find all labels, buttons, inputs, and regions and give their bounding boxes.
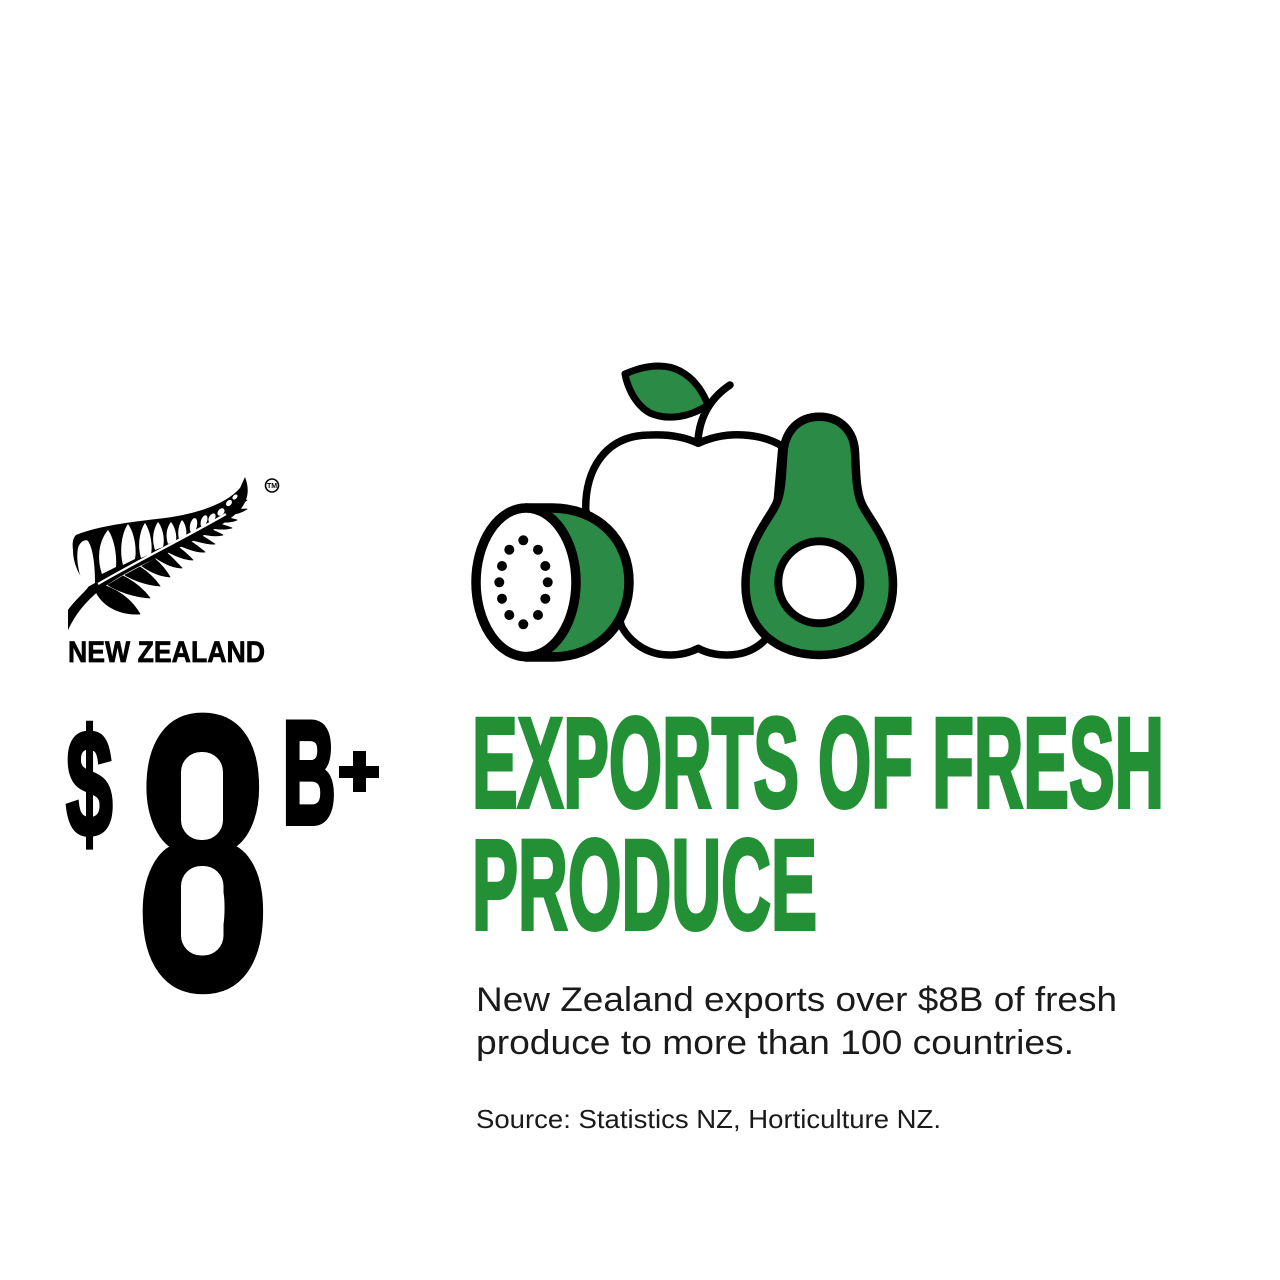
fern upper white leaflets <box>77 493 239 588</box>
body text <box>476 981 1117 1062</box>
icon: fresh produce (kiwi, apple, avocado) <box>476 366 893 657</box>
apple stem <box>698 385 730 440</box>
dollar sign: $ <box>66 700 113 869</box>
numeral 8 lower counter <box>181 866 224 956</box>
icon: apple <box>586 366 782 655</box>
logo wordmark: NEW ZEALAND <box>68 636 265 669</box>
body line 1: New Zealand exports over $8B of fresh <box>476 981 1117 1019</box>
body line 2: produce to more than 100 countries. <box>476 1024 1074 1062</box>
letter B: B <box>282 690 336 855</box>
trademark symbol: TM <box>267 483 277 490</box>
heading <box>472 692 1164 957</box>
big figure: $8B+ <box>66 639 379 1068</box>
fern midrib <box>98 514 226 584</box>
logo: New Zealand fern mark <box>68 477 278 669</box>
fern lower black leaflets <box>96 500 247 614</box>
icon: avocado <box>746 417 893 655</box>
icon: silver fern <box>68 477 248 630</box>
large numeral 8: 8 <box>138 639 268 1068</box>
plus sign <box>339 751 379 792</box>
trademark symbol <box>266 479 278 492</box>
source note: Source: Statistics NZ, Horticulture NZ. <box>476 1104 941 1134</box>
kiwi seeds <box>494 535 553 629</box>
numeral 8 upper counter <box>181 752 223 840</box>
heading line 2: PRODUCE <box>472 814 817 957</box>
apple leaf <box>625 366 708 417</box>
icon: kiwi half <box>476 508 629 657</box>
